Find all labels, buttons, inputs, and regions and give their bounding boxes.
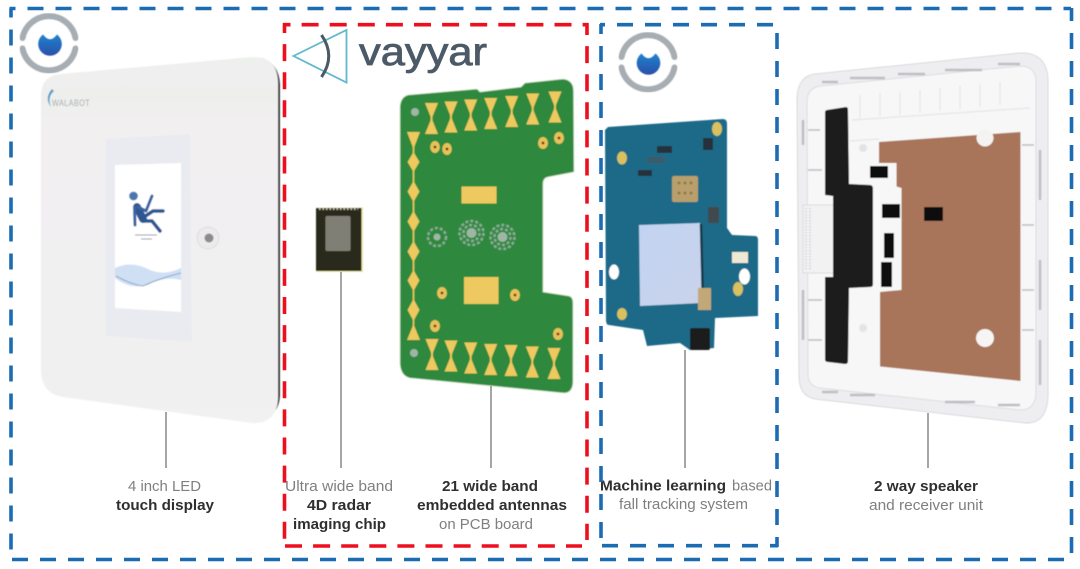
- icon: falling person: [129, 192, 163, 239]
- label: touch display: [116, 478, 215, 514]
- chip: 4D radar imaging chip: [316, 208, 363, 272]
- label: machine learning: based: [732, 478, 772, 494]
- mounting posts: [859, 130, 994, 347]
- leader line: display: [165, 412, 167, 468]
- left antenna chain: [407, 132, 420, 340]
- shield can: [639, 223, 702, 306]
- brand mark: [48, 89, 90, 109]
- panel: back housing with speaker: [797, 53, 1048, 423]
- component clusters: [428, 221, 514, 249]
- label: speaker: and receiver unit: [869, 497, 984, 514]
- logo: top left circle: [22, 16, 76, 70]
- top bowtie antennas: [425, 92, 562, 134]
- bottom bowtie antennas: [426, 339, 560, 379]
- label: speaker: 2 way speaker: [874, 478, 978, 495]
- wave graphic: [115, 264, 181, 286]
- mounting holes: [609, 264, 619, 280]
- touch screen: [115, 163, 181, 312]
- label: touch display: touch display: [116, 497, 215, 514]
- inner ribs: [850, 82, 1030, 141]
- logo: vayyar: vayyar: [359, 31, 487, 74]
- label: machine learning: Machine learning: [600, 478, 726, 494]
- label: radar chip: [285, 478, 393, 533]
- screen bezel: [106, 134, 192, 342]
- gold pads: [462, 186, 498, 304]
- leader line: antennas: [490, 386, 492, 468]
- label: radar chip: imaging chip: [293, 516, 386, 533]
- label: touch display: 4 inch LED: [128, 478, 201, 495]
- blue dashed frame: machine learning: [600, 24, 778, 547]
- antenna PCB board: [400, 79, 574, 393]
- logo: vayyar: [294, 30, 487, 82]
- side connector: [803, 205, 834, 273]
- leader line: ML board: [684, 350, 686, 468]
- button: [197, 227, 219, 249]
- leader line: chip: [340, 272, 342, 468]
- logo: middle circle: [622, 35, 674, 89]
- gold vias: [617, 122, 743, 320]
- label: antennas: on PCB board: [439, 516, 533, 533]
- label: machine learning: [600, 478, 772, 513]
- panel: front cover with touch display: [41, 57, 280, 423]
- copper shielding: [879, 132, 1020, 381]
- black pads: [870, 166, 943, 287]
- label: antennas: [417, 478, 567, 533]
- audio jack: [690, 328, 710, 350]
- gold modules: [672, 176, 698, 202]
- label: radar chip: 4D radar: [307, 497, 371, 514]
- brand mark: WALABOT: [52, 98, 90, 109]
- label: antennas: 21 wide band: [442, 478, 538, 495]
- clip details: [803, 64, 1040, 405]
- machine learning PCB board: [605, 119, 758, 350]
- small components: [638, 138, 719, 223]
- mounting vias: [430, 132, 564, 340]
- label: antennas: embedded antennas: [417, 497, 567, 514]
- label: speaker: [869, 478, 984, 514]
- label: radar chip: Ultra wide band: [285, 478, 393, 495]
- red dashed frame: vayyar radar: [283, 23, 588, 546]
- leader line: speaker: [927, 413, 929, 468]
- black foam: [825, 107, 873, 364]
- power connector: [732, 252, 748, 263]
- label: machine learning: fall tracking system: [619, 496, 748, 513]
